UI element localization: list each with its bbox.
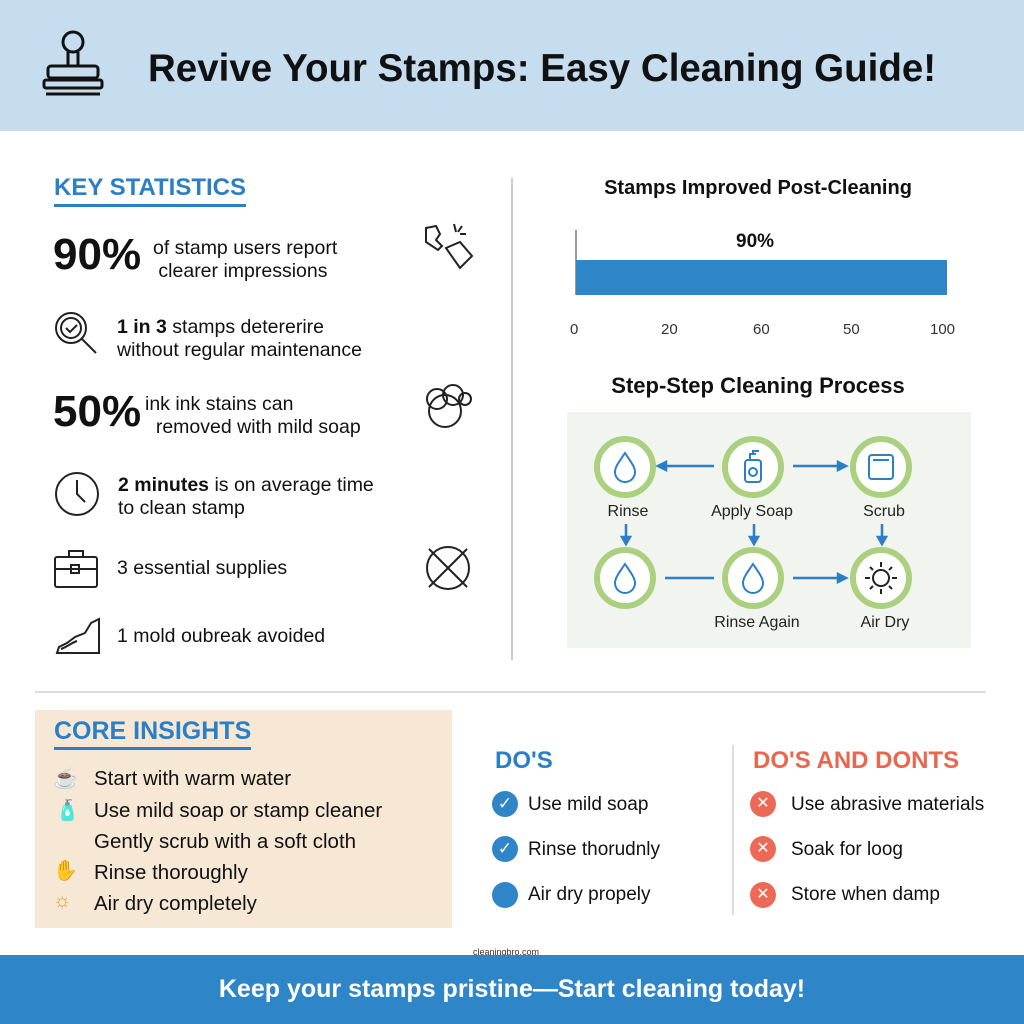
- vertical divider: [511, 178, 513, 660]
- panel: don'ts: DO'S AND DONTS: [753, 747, 959, 774]
- stat: 2 minutes: to clean stamp: [118, 497, 245, 519]
- panel: do's: ✓: [498, 794, 512, 813]
- stat: 50%: [53, 384, 472, 438]
- panel: don'ts: ✕: [756, 886, 770, 903]
- stat: 50%: 50%: [53, 387, 141, 436]
- process diagram: [567, 412, 971, 648]
- panel: do's: DO'S: [495, 747, 553, 774]
- process diagram: Rinse: [608, 503, 649, 520]
- stat: 3 supplies: 3 essential supplies: [117, 557, 287, 579]
- stat: 3 supplies: [54, 546, 470, 590]
- panel: don'ts: ✕: [756, 795, 770, 812]
- icon: mold: [56, 617, 100, 654]
- stat: 90%: [53, 224, 474, 282]
- icon: clock: [55, 472, 99, 516]
- panel: don'ts: Store when damp: [791, 884, 940, 905]
- bar chart: 20: [661, 321, 678, 338]
- panel: do's: Rinse thorudnly: [528, 839, 660, 860]
- stat: 1 in 3: without regular maintenance: [117, 339, 362, 361]
- panel: core insights: Rinse thoroughly: [94, 861, 248, 884]
- footer band: [0, 955, 1024, 1024]
- panel: don'ts: [750, 747, 984, 908]
- horizontal divider: [35, 691, 986, 693]
- panel: core insights: Use mild soap or stamp cleaner: [94, 799, 382, 822]
- stat: 2 minutes: [55, 472, 374, 519]
- bar chart: 60: [753, 321, 770, 338]
- stat: 90%: of stamp users report: [153, 237, 337, 259]
- source text: cleaningbro.com: [473, 947, 539, 957]
- header band: [0, 0, 1024, 131]
- title: Revive Your Stamps: Easy Cleaning Guide!: [148, 47, 936, 90]
- icon: magnifier: [55, 312, 97, 354]
- panel: don'ts: Use abrasive materials: [791, 794, 984, 815]
- footer band: Keep your stamps pristine—Start cleaning today!: [219, 975, 805, 1003]
- bar chart: 100: [930, 321, 955, 338]
- panel: core insights: [35, 710, 452, 928]
- panel: do's: ✓: [498, 839, 512, 858]
- stat: 90%: clearer impressions: [158, 260, 327, 282]
- panel: key statistics: [53, 174, 474, 654]
- stat: 1 mold: [56, 617, 325, 654]
- panel: do's: [492, 747, 660, 908]
- bar chart: Stamps Improved Post-Cleaning: [604, 177, 912, 199]
- stat: 1 mold: 1 mold oubreak avoided: [117, 625, 325, 647]
- stat: 50%: ink ink stains can: [145, 393, 294, 415]
- heading: core insights: CORE INSIGHTS: [54, 717, 251, 745]
- panel: core insights: ☼: [53, 890, 71, 912]
- process diagram: Scrub: [863, 503, 905, 520]
- process diagram: Rinse Again: [714, 614, 800, 631]
- icon: broken stamp: [425, 224, 474, 270]
- icon: crossed circle: [426, 546, 470, 590]
- panel: don'ts: Soak for loog: [791, 839, 903, 860]
- panel: core insights: ☕: [53, 768, 78, 790]
- panel: core insights: Gently scrub with a soft cloth: [94, 830, 356, 853]
- icon: toolbox: [54, 550, 98, 588]
- bar chart: 90%: [736, 231, 774, 252]
- panel: don'ts: ✕: [756, 840, 770, 857]
- panel: core insights: Air dry completely: [94, 892, 257, 915]
- panel: core insights: Start with warm water: [94, 767, 291, 790]
- bar chart: 50: [843, 321, 860, 338]
- heading: key statistics: KEY STATISTICS: [54, 174, 246, 201]
- process diagram: Air Dry: [861, 614, 909, 631]
- stat: 2 minutes: 2 minutes is on average time: [118, 474, 374, 496]
- stat: 1 in 3: 1 in 3 stamps detererire: [117, 316, 324, 338]
- icon: stamp: [42, 30, 104, 96]
- panel: core insights: 🧴: [55, 800, 80, 822]
- process diagram: Apply Soap: [711, 503, 793, 520]
- bar chart: [570, 177, 955, 338]
- stat: 50%: removed with mild soap: [156, 416, 361, 438]
- icon: bubbles: [426, 384, 472, 428]
- stat: 1 in 3: [55, 312, 362, 361]
- bar chart: 0: [570, 321, 578, 338]
- panel: do's: Air dry propely: [528, 884, 650, 905]
- panel: core insights: ✋: [53, 860, 78, 882]
- stat: 90%: 90%: [53, 230, 141, 279]
- heading: process: Step-Step Cleaning Process: [611, 373, 905, 398]
- panel: do's: Use mild soap: [528, 794, 648, 815]
